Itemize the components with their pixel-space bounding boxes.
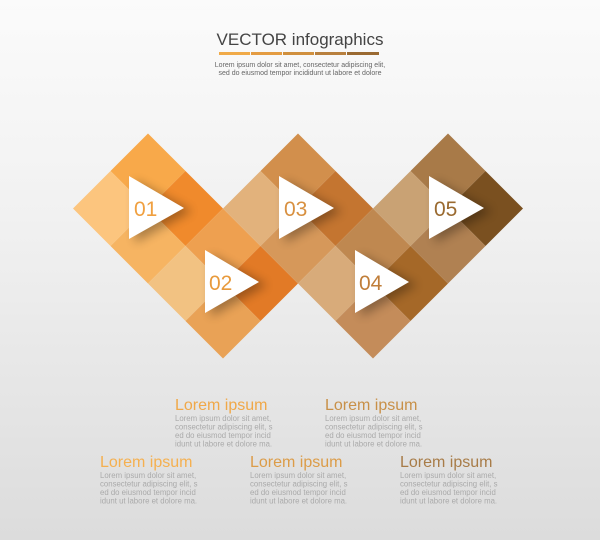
subtitle <box>215 62 385 77</box>
text block 4: ed do eiusmod tempor incid <box>325 431 421 440</box>
step 02: 02 <box>209 272 232 295</box>
text block 1: consectetur adipiscing elit, s <box>100 480 198 488</box>
step 04: 04 <box>359 272 383 295</box>
text block 5: Lorem ipsum <box>400 454 492 471</box>
text block 2: consectetur adipiscing elit, s <box>175 422 273 432</box>
step 03: 03 <box>284 198 307 221</box>
step 03 <box>279 176 342 243</box>
step 01 <box>129 176 192 243</box>
text block 2: ed do eiusmod tempor incid <box>175 431 271 440</box>
text block 1 <box>100 454 198 506</box>
step 04 <box>355 250 417 317</box>
text block 1: idunt ut labore et dolore ma. <box>100 496 197 506</box>
step 05: 05 <box>434 198 457 221</box>
diagram: W shape of diamond tiles <box>73 134 523 358</box>
text block 4: Lorem ipsum <box>325 397 417 414</box>
text block 3: ed do eiusmod tempor incid <box>250 488 346 497</box>
text block 3: Lorem ipsum dolor sit amet, <box>250 471 346 480</box>
text block 5: idunt ut labore et dolore ma. <box>400 496 497 506</box>
title: VECTOR infographics <box>217 30 383 49</box>
text block 4 <box>325 397 423 448</box>
step 02 <box>205 250 267 317</box>
subtitle: Lorem ipsum dolor sit amet, consectetur adipiscing elit, <box>215 62 385 69</box>
text block 5: Lorem ipsum dolor sit amet, <box>400 471 496 480</box>
text block 5 <box>400 454 498 506</box>
text block 3 <box>250 454 348 506</box>
text block 2: Lorem ipsum <box>175 397 267 414</box>
text block 1: ed do eiusmod tempor incid <box>100 488 196 497</box>
text block 2: idunt ut labore et dolore ma. <box>175 440 272 448</box>
text block 5: ed do eiusmod tempor incid <box>400 488 496 497</box>
subtitle: sed do eiusmod tempor incididunt ut labore et dolore <box>218 70 382 77</box>
text block 4: Lorem ipsum dolor sit amet, <box>325 414 421 423</box>
text block 1: Lorem ipsum <box>100 454 192 471</box>
step 05 <box>429 176 492 243</box>
text block 4: idunt ut labore et dolore ma. <box>325 440 422 448</box>
text block 3: Lorem ipsum <box>250 454 342 471</box>
text block 1: Lorem ipsum dolor sit amet, <box>100 471 196 480</box>
text block 2 <box>175 397 273 448</box>
text block 3: consectetur adipiscing elit, s <box>250 480 348 488</box>
text block 5: consectetur adipiscing elit, s <box>400 480 498 488</box>
step 01: 01 <box>134 198 157 221</box>
text block 2: Lorem ipsum dolor sit amet, <box>175 414 271 423</box>
text block 3: idunt ut labore et dolore ma. <box>250 496 347 506</box>
text block 4: consectetur adipiscing elit, s <box>325 422 423 432</box>
